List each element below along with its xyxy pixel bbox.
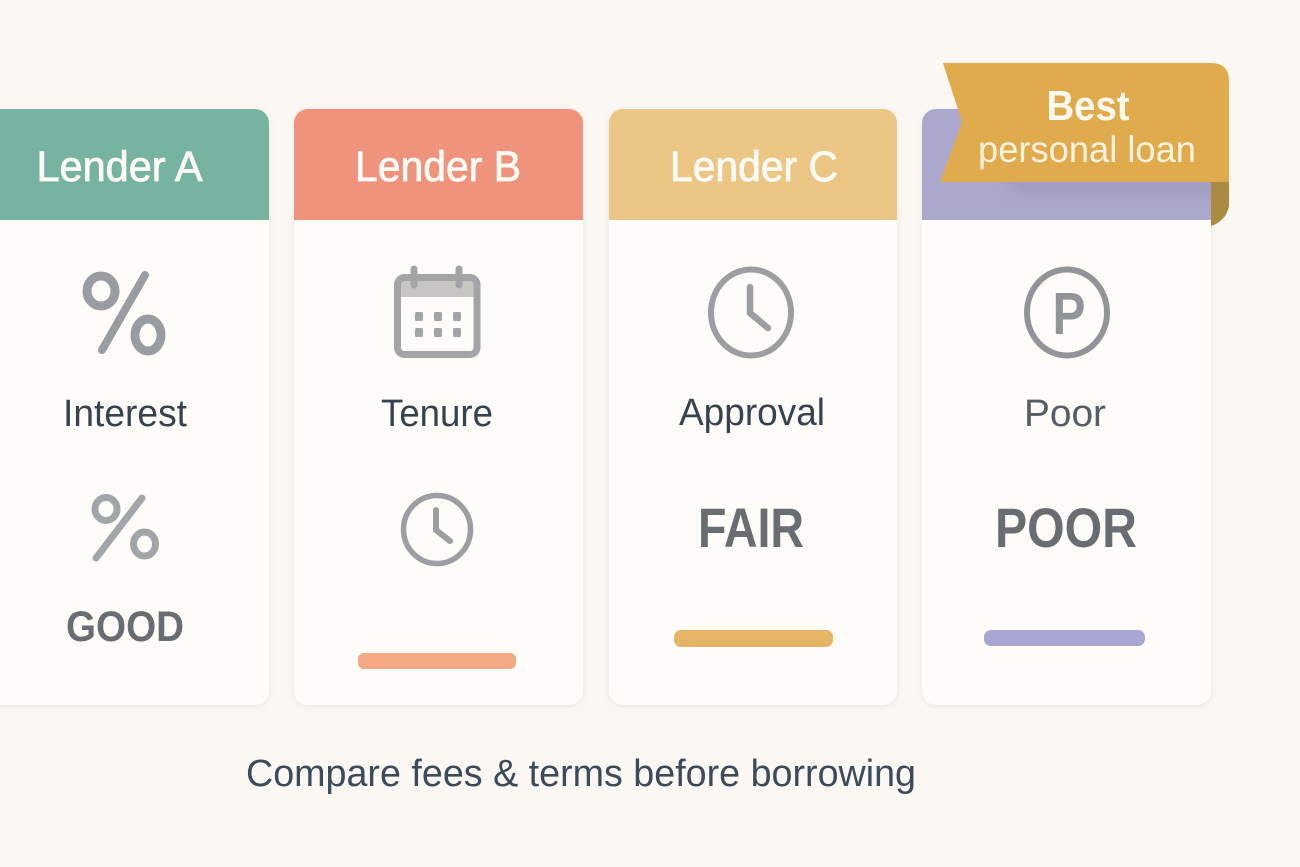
panel: Lender B [294,109,583,705]
icon: percent large [87,275,161,351]
rating bar [984,630,1145,646]
icon: clock [711,270,791,356]
header: Lender A: Lender A [36,143,203,191]
header: Lender B: Lender B [355,143,521,191]
icon: parking circle: P [1052,281,1086,347]
header: Lender C: Lender C [670,143,838,191]
rating: FAIR: FAIR [698,496,804,559]
label: Approval: Approval [679,392,825,434]
rating: POOR: POOR [995,496,1137,559]
header: Lender B [294,109,583,220]
ribbon: Best personal loan: Best [1046,82,1130,129]
icon: clock [404,496,470,564]
header: Lender A [0,109,269,220]
panel: Lender C [609,109,897,705]
label: Tenure: Tenure [381,393,493,435]
icon: parking circle [1027,270,1107,356]
rating: GOOD: GOOD [66,603,184,651]
rating bar [358,653,516,669]
label: Poor: Poor [1024,393,1106,435]
ribbon: Best personal loan [940,63,1229,226]
rating bar [674,630,833,647]
caption: Compare fees & terms before borrowing [246,753,916,795]
header: Lender C [609,109,897,220]
header: Lender D [922,109,1230,220]
icon: percent small [95,498,156,558]
panel: Lender A [0,109,269,705]
icon: calendar [398,269,477,354]
panel: Lender D [922,109,1230,705]
label: Interest: Interest [63,393,187,435]
ribbon: Best personal loan: personal loan [978,129,1196,170]
